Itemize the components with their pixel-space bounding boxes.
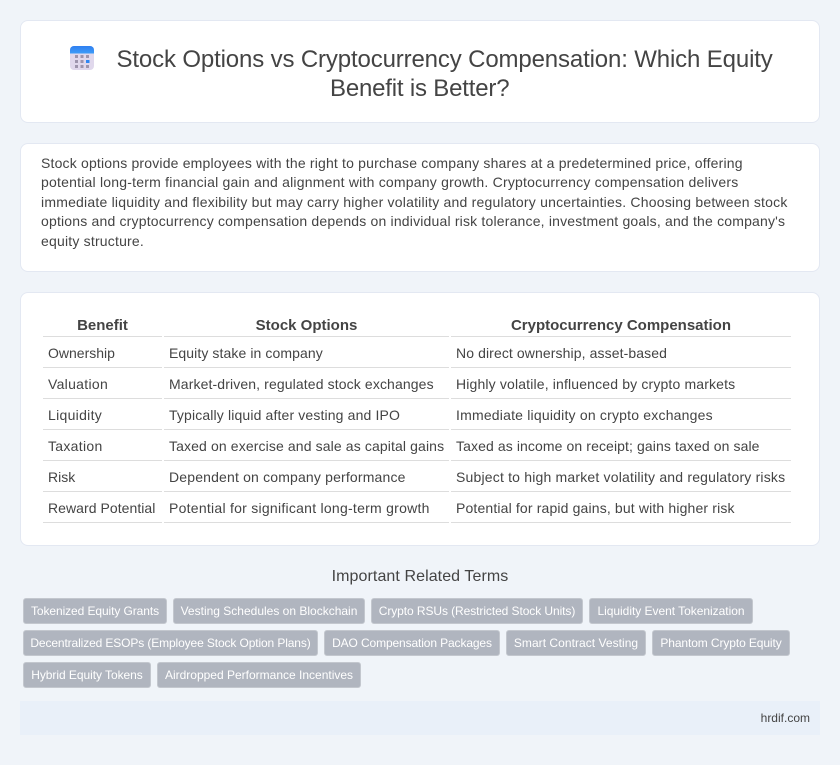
panel: comparison table: No direct ownership, asset-based	[456, 344, 667, 360]
tag: Phantom Crypto Equity	[660, 636, 782, 650]
panel: comparison table: Taxed on exercise and sale as capital gains	[169, 438, 444, 454]
panel: comparison table: Valuation	[48, 376, 108, 392]
panel: comparison table: Taxation	[48, 438, 103, 454]
tag	[23, 662, 151, 688]
tag: Smart Contract Vesting	[514, 636, 638, 650]
heading: Stock Options vs Cryptocurrency Compensation: Which Equity	[116, 46, 773, 73]
panel: comparison table: Highly volatile, influenced by crypto markets	[456, 376, 735, 392]
panel: comparison table: Dependent on company performance	[169, 468, 406, 484]
tag: Liquidity Event Tokenization	[597, 604, 745, 618]
tag	[371, 598, 583, 624]
tag	[324, 630, 500, 656]
panel: comparison table: Cryptocurrency Compensation	[511, 317, 731, 334]
footer credit: hrdif.com	[761, 711, 810, 725]
heading: related terms: Important Related Terms	[332, 568, 508, 585]
panel: comparison table: Equity stake in company	[169, 344, 323, 360]
tag: Airdropped Performance Incentives	[165, 668, 353, 682]
tag	[23, 630, 318, 656]
tag	[23, 598, 167, 624]
panel: comparison table: Ownership	[48, 344, 115, 360]
panel: comparison table: Market-driven, regulated stock exchanges	[169, 376, 434, 392]
heading: Benefit is Better?	[330, 75, 509, 102]
tag	[589, 598, 753, 624]
panel: comparison table: Immediate liquidity on crypto exchanges	[456, 406, 713, 422]
panel: introduction text: immediate liquidity and flexibility but may carry higher volatility and regulatory uncertainties. Choosing between stock	[41, 194, 788, 210]
panel: comparison table: Potential for significant long-term growth	[169, 500, 430, 516]
tag: Decentralized ESOPs (Employee Stock Option Plans)	[30, 636, 311, 650]
panel: comparison table: Benefit	[77, 317, 128, 334]
panel: title card	[20, 20, 820, 123]
tag	[652, 630, 790, 656]
heading	[116, 46, 773, 102]
panel: comparison table: Reward Potential	[48, 500, 155, 516]
panel: related term tags	[23, 598, 790, 688]
icon: calendar	[70, 46, 94, 70]
panel: comparison table: Stock Options	[256, 317, 357, 334]
panel: comparison table: Typically liquid after vesting and IPO	[169, 406, 400, 422]
panel: comparison table: Potential for rapid gains, but with higher risk	[456, 500, 735, 516]
panel: introduction text: options and cryptocurrency compensation depends on individual risk tolerance, investment goals, and the company's	[41, 213, 785, 229]
tag: Vesting Schedules on Blockchain	[181, 604, 357, 618]
panel: comparison table: Risk	[48, 468, 75, 484]
panel: introduction text: Stock options provide employees with the right to purchase company shares at a predetermined price, offering	[41, 155, 743, 171]
panel: comparison table	[20, 292, 820, 546]
tag: Crypto RSUs (Restricted Stock Units)	[379, 604, 575, 618]
tag: Tokenized Equity Grants	[31, 604, 159, 618]
tag	[173, 598, 365, 624]
tag	[157, 662, 361, 688]
tag: DAO Compensation Packages	[332, 636, 492, 650]
panel: introduction text: potential long-term financial gain and alignment with company growth. Cryptocurrency compensation delivers	[41, 174, 738, 190]
tag: Hybrid Equity Tokens	[31, 668, 143, 682]
footer	[20, 701, 820, 735]
panel: comparison table: Liquidity	[48, 406, 102, 422]
panel: comparison table: Taxed as income on receipt; gains taxed on sale	[456, 438, 760, 454]
panel: comparison table: Subject to high market volatility and regulatory risks	[456, 468, 785, 484]
tag	[506, 630, 646, 656]
panel: introduction text: equity structure.	[41, 233, 144, 249]
panel: introduction text	[20, 143, 820, 272]
